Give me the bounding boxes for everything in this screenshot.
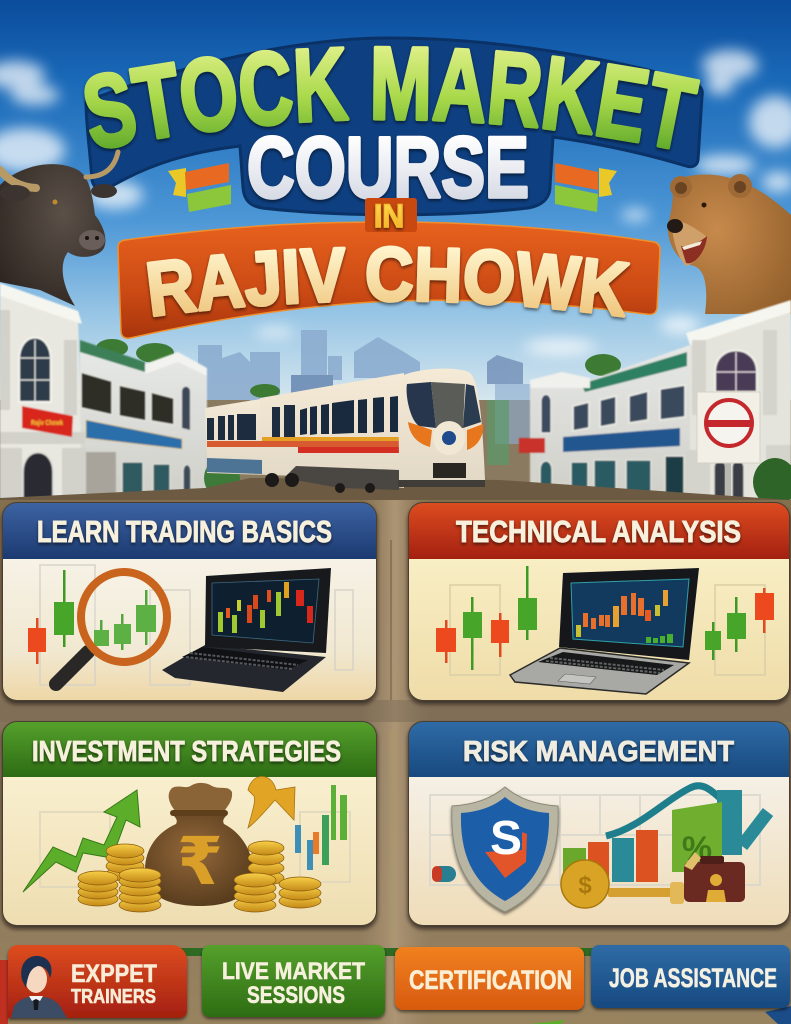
icon: trainer avatar (11, 956, 67, 1018)
icon: laptop (510, 568, 699, 694)
logo (433, 421, 465, 455)
metro train (205, 369, 485, 493)
chart: bars: % (682, 830, 712, 868)
icon: magnifying glass (56, 572, 167, 684)
heading bar (3, 503, 376, 559)
heading bar (409, 503, 789, 559)
tab text: TRAINERS (71, 986, 156, 1008)
ribbon: right (555, 163, 617, 212)
upper windows (573, 385, 685, 431)
title: STOCK MARKET: STOCK MARKET (82, 46, 702, 153)
sign: red shop (22, 406, 73, 437)
shrub right (753, 458, 791, 506)
candlesticks (28, 570, 156, 664)
orange nose (408, 422, 432, 447)
tab: Live Market Sessions: SESSIONS (247, 982, 345, 1009)
sign: blue shop (86, 420, 182, 449)
panel: Technical Analysis (409, 503, 789, 703)
heading: LEARN TRADING BASICS (37, 514, 332, 549)
decoration: bottom arrow tip (530, 1020, 566, 1024)
city skyline (198, 330, 550, 444)
left station building (0, 283, 207, 504)
heading bar (409, 722, 789, 777)
icon: capsule (432, 866, 456, 882)
candlesticks (436, 566, 774, 670)
bull (0, 152, 118, 306)
badge: IN (365, 198, 417, 234)
metro sign post (697, 392, 760, 504)
red and yellow stripe (207, 437, 399, 453)
panel: Risk Management (409, 722, 789, 928)
front cab (399, 369, 485, 487)
lower windows (540, 456, 744, 500)
tab: Certification (395, 947, 584, 1010)
arched window (19, 338, 51, 402)
windows rear (207, 405, 295, 440)
panel: Learn Trading Basics (3, 503, 376, 703)
ribbon: left (168, 163, 231, 212)
shrub (204, 458, 240, 498)
tab: Certification: CERTIFICATION (409, 965, 572, 995)
icon: gold flag (248, 776, 295, 828)
icon: laptop (162, 568, 331, 692)
tab: Job Assistance (591, 945, 790, 1008)
sign: red shop: Rajiv Chowk (31, 420, 63, 427)
chart: bars (563, 786, 768, 882)
badge: IN: IN (374, 198, 404, 234)
road (0, 478, 791, 515)
grille (433, 463, 466, 478)
title: COURSE: COURSE (247, 120, 529, 216)
banner: Rajiv Chowk (118, 222, 660, 338)
sky background (0, 0, 791, 400)
tab: Live Market Sessions (202, 945, 385, 1017)
heading bar (3, 722, 376, 777)
upper windows (81, 372, 174, 425)
bear (667, 174, 791, 314)
tab: Live Market Sessions: LIVE MARKET (222, 958, 365, 985)
ground-floor windows (122, 462, 191, 503)
laptop chart (576, 590, 673, 643)
title plate (86, 38, 702, 215)
heading: TECHNICAL ANALYSIS (456, 514, 741, 549)
heading: RISK MANAGEMENT (463, 736, 734, 768)
connector strip behind tabs (180, 948, 600, 956)
icon: coin stacks (78, 841, 321, 912)
tab text (71, 960, 157, 1008)
decoration: red edge (0, 960, 8, 1024)
underframe (284, 466, 399, 490)
column details (0, 310, 86, 503)
panel: Investment Strategies (3, 722, 376, 928)
sign: blue shop (563, 428, 680, 452)
front block (0, 285, 82, 500)
tab: Expert Trainers (8, 945, 187, 1018)
sign: red small (519, 438, 545, 453)
title: RAJIV CHOWK: RAJIV CHOWK (144, 245, 632, 322)
columns (530, 330, 791, 500)
icon: gold coin and key (561, 860, 684, 908)
heading: INVESTMENT STRATEGIES (32, 736, 341, 768)
icon: shield (452, 787, 558, 912)
tab text: EXPPET (71, 960, 157, 988)
trees behind buildings (96, 339, 621, 465)
wing walls (80, 352, 207, 500)
arched window (715, 350, 757, 392)
icon: money bag with rupee: ₹ (177, 823, 223, 900)
icon: bull horns (0, 152, 118, 188)
icon: shield: S (490, 812, 522, 865)
rear car (205, 393, 298, 476)
decoration: blue corner (765, 1006, 791, 1024)
arched door (23, 452, 53, 504)
icon: mini candlesticks (295, 785, 347, 870)
icon: briefcase (684, 852, 745, 902)
windows side (300, 396, 398, 435)
right station building (519, 300, 791, 500)
clouds (0, 50, 791, 355)
icon: gold coin and key: $ (578, 872, 592, 899)
icon: money bag with rupee (145, 783, 253, 906)
icon: growth arrow (23, 790, 140, 892)
windshield (407, 382, 436, 428)
laptop chart (218, 582, 313, 633)
lower background (0, 500, 791, 1024)
